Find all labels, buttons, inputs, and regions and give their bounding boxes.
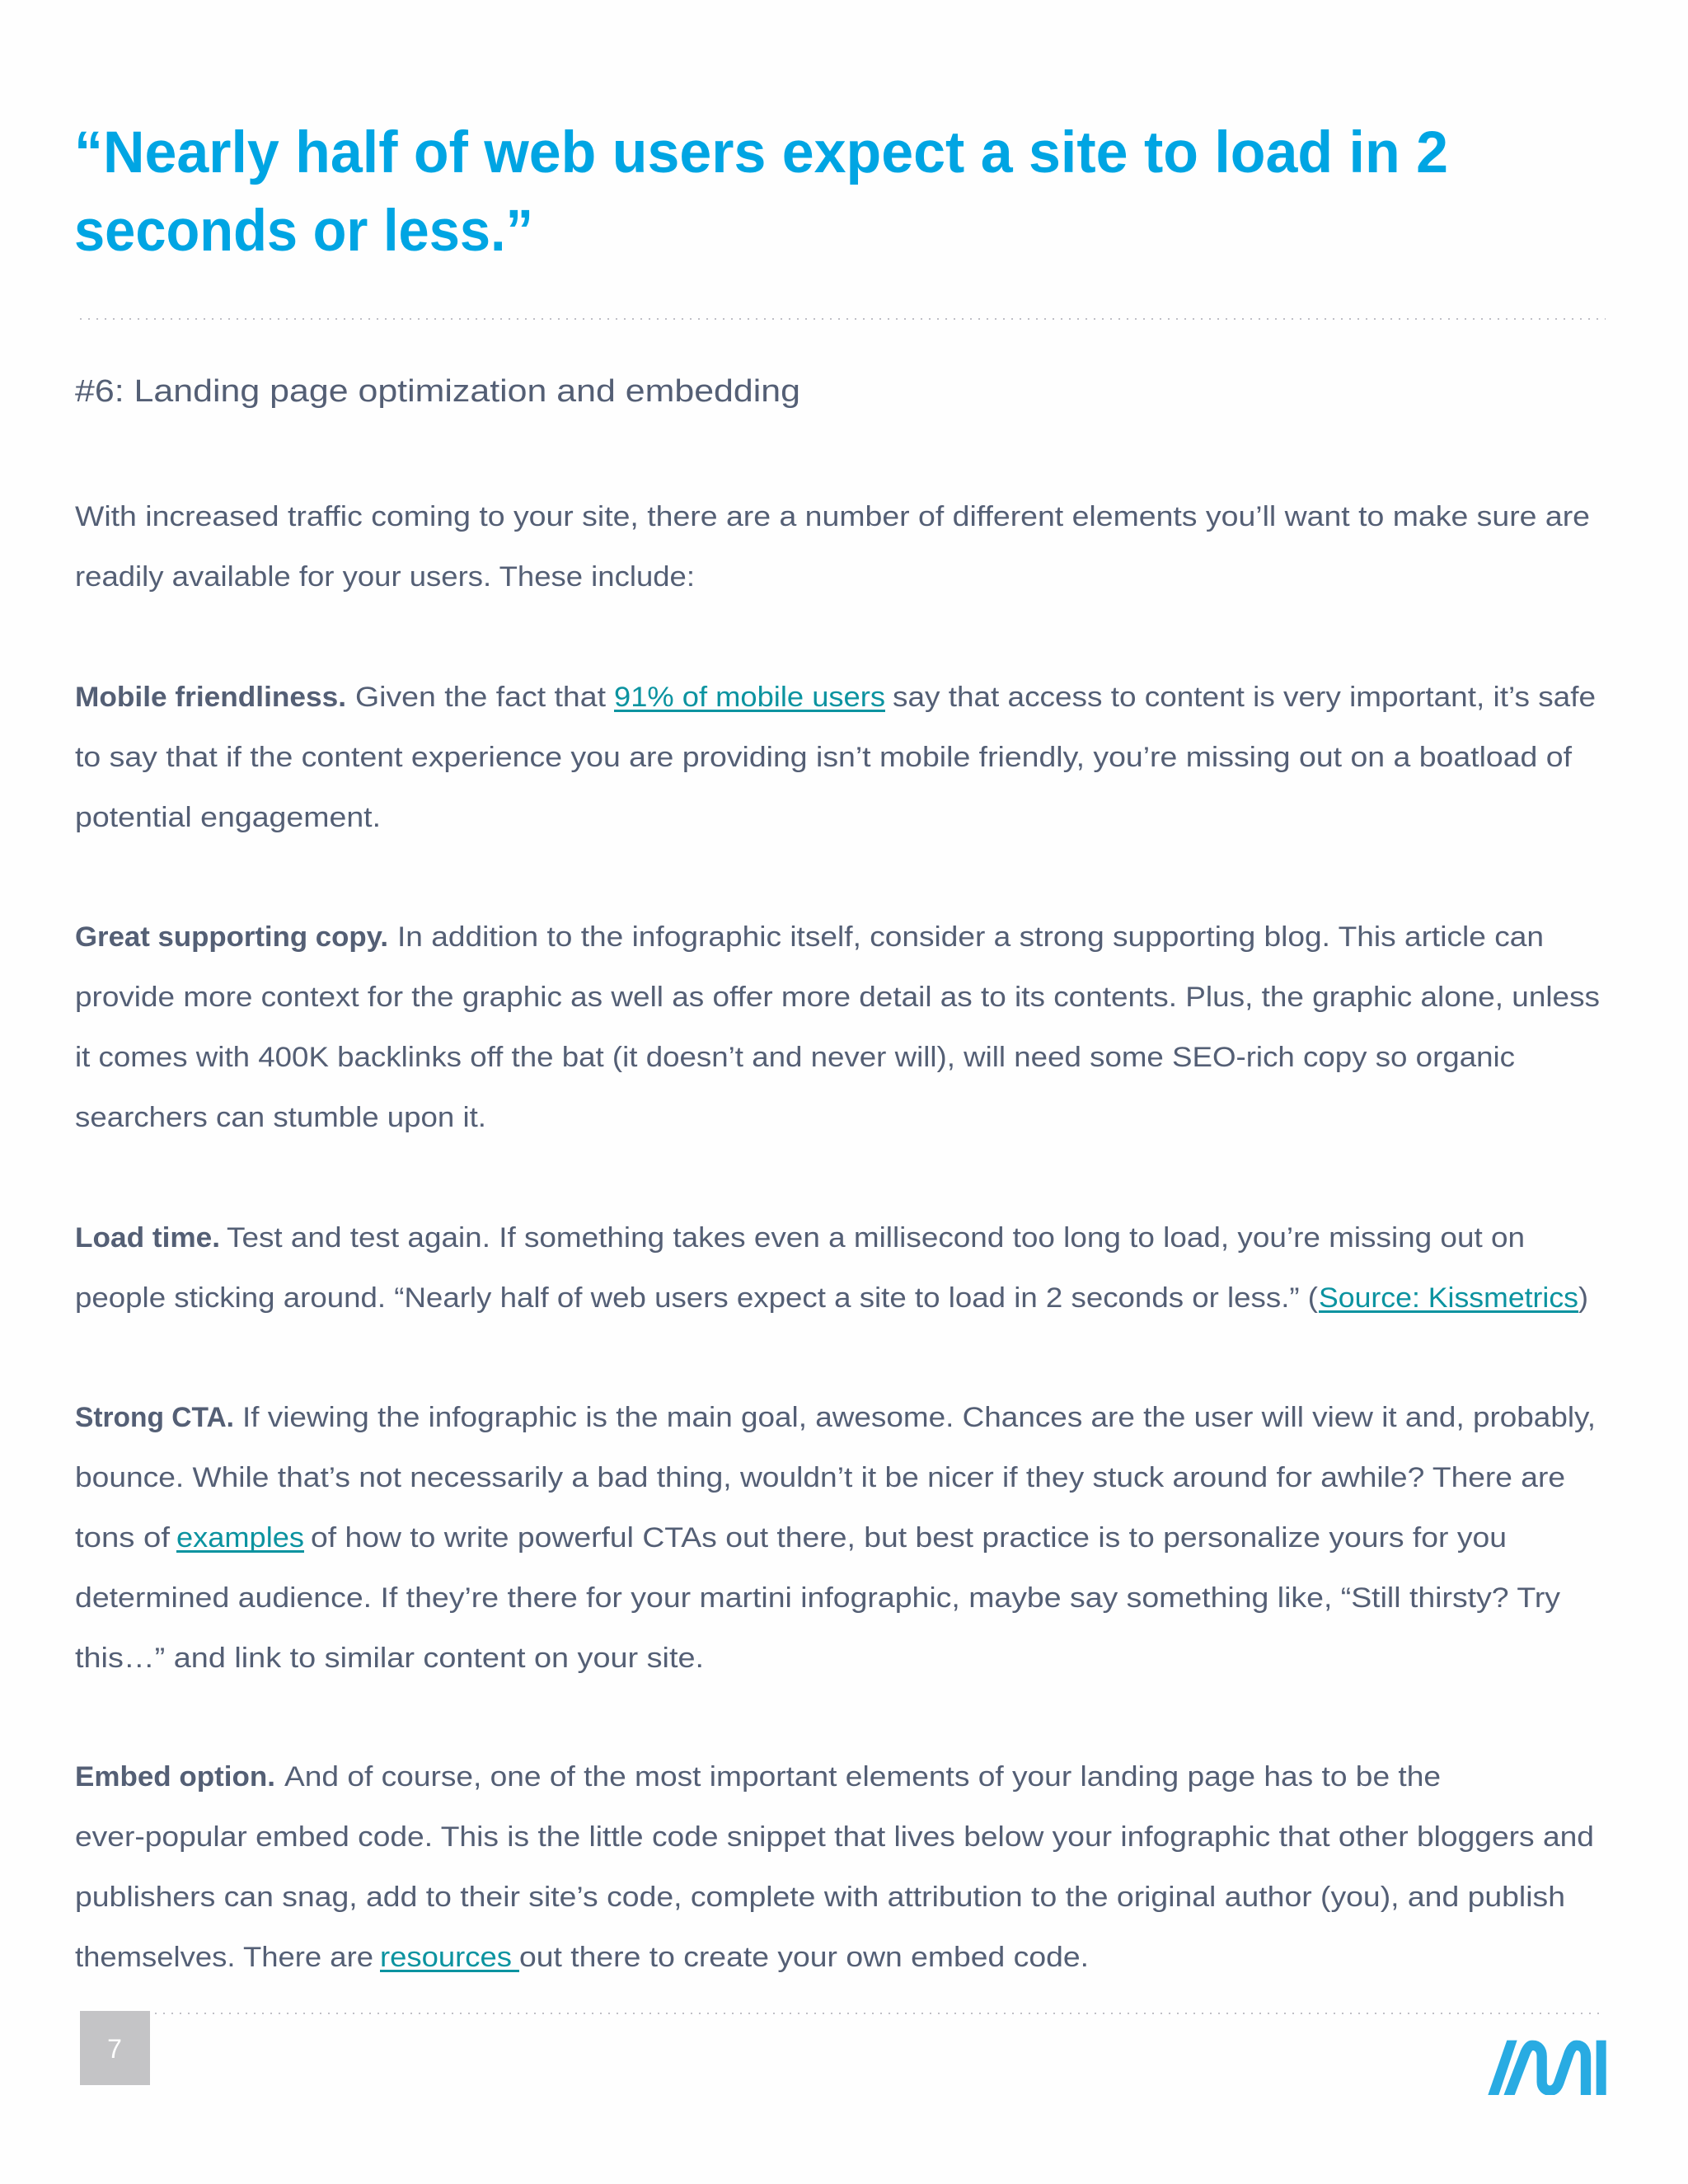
paragraph: embed option: out there to create your own embed code.	[519, 1942, 1089, 1973]
section heading: #6: Landing page optimization and embedding	[75, 374, 800, 409]
paragraph: strong CTA	[75, 1402, 1596, 1674]
icon: logo	[1488, 2041, 1606, 2099]
paragraph: strong CTA: examples	[176, 1522, 304, 1554]
paragraph: mobile friendliness: say that access to content is very important, it’s safe	[893, 682, 1596, 713]
page number badge: 7	[107, 2034, 122, 2064]
paragraph: great supporting copy: it comes with 400K backlinks off the bat (it doesn’t and never will), will need some SEO-rich copy so organic	[75, 1042, 1515, 1073]
paragraph: embed option: Embed option.	[75, 1761, 275, 1793]
paragraph: great supporting copy	[75, 921, 1600, 1133]
paragraph: embed option: And of course, one of the most important elements of your landing page has to be the	[284, 1761, 1441, 1793]
title: “Nearly half of web users expect a site to load in 2	[74, 120, 1448, 185]
paragraph: strong CTA: of how to write powerful CTAs out there, but best practice is to personalize yours for you	[311, 1522, 1507, 1554]
paragraph: load time: people sticking around. “Nearly half of web users expect a site to load in 2 seconds or less.” (	[75, 1282, 1319, 1314]
paragraph: load time: )	[1578, 1282, 1588, 1314]
paragraph: mobile friendliness: potential engagement.	[75, 802, 381, 833]
paragraph: load time: Test and test again. If something takes even a millisecond too long to load, you’re missing out on	[227, 1222, 1525, 1254]
paragraph: great supporting copy: searchers can stumble upon it.	[75, 1102, 486, 1133]
paragraph: mobile friendliness: Mobile friendliness.	[75, 682, 346, 713]
paragraph: load time	[75, 1222, 1588, 1314]
paragraph: mobile friendliness	[75, 682, 1596, 833]
paragraph: strong CTA: bounce. While that’s not necessarily a bad thing, wouldn’t it be nicer if they stuck around for awhile? There are	[75, 1462, 1565, 1493]
paragraph: mobile friendliness: to say that if the content experience you are providing isn’t mobile friendly, you’re missing out on a boatload of	[75, 742, 1573, 773]
paragraph: embed option: resources	[380, 1942, 512, 1973]
paragraph: embed option	[75, 1761, 1594, 1973]
title: seconds or less.”	[74, 199, 533, 264]
paragraph: great supporting copy: provide more context for the graphic as well as offer more detail as to its contents. Plus, the graphic alone, unless	[75, 982, 1600, 1013]
page number badge	[80, 2011, 150, 2085]
paragraph: embed option: publishers can snag, add to their site’s code, complete with attribution to the original author (you), and publish	[75, 1882, 1565, 1913]
paragraph: great supporting copy: In addition to the infographic itself, consider a strong supporting blog. This article can	[397, 921, 1544, 953]
paragraph: great supporting copy: Great supporting copy.	[75, 921, 388, 953]
paragraph: mobile friendliness: 91% of mobile users	[614, 682, 885, 713]
paragraph: strong CTA: tons of	[75, 1522, 171, 1554]
intro paragraph: With increased traffic coming to your site, there are a number of different elements you’ll want to make sure are	[75, 501, 1590, 532]
paragraph: strong CTA: Strong CTA.	[75, 1402, 234, 1433]
paragraph: strong CTA: this…” and link to similar content on your site.	[75, 1643, 704, 1674]
paragraph: embed option: themselves. There are	[75, 1942, 373, 1973]
paragraph: mobile friendliness: Given the fact that	[355, 682, 607, 713]
paragraph: strong CTA: If viewing the infographic is the main goal, awesome. Chances are the user will view it and, probably,	[242, 1402, 1596, 1433]
paragraph: load time: Source: Kissmetrics	[1319, 1282, 1578, 1314]
intro paragraph: readily available for your users. These include:	[75, 561, 695, 593]
intro paragraph	[75, 501, 1590, 593]
title	[74, 120, 1448, 264]
paragraph: strong CTA: determined audience. If they’re there for your martini infographic, maybe say something like, “Still thirsty? Try	[75, 1582, 1560, 1614]
paragraph: load time: Load time.	[75, 1222, 220, 1254]
paragraph: embed option: ever-popular embed code. This is the little code snippet that lives below your infographic that other bloggers and	[75, 1821, 1594, 1853]
